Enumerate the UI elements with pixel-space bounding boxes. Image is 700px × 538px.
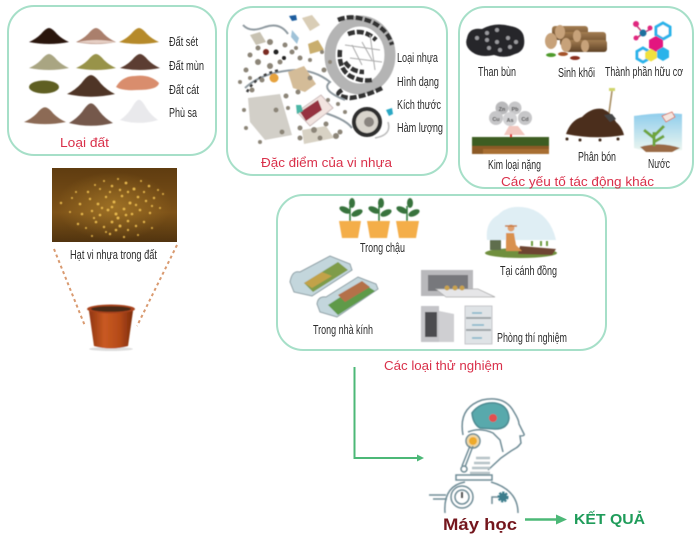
icon: fertilizer [566,88,624,142]
factor labels, lower row [488,149,670,172]
heading: other factors: Các yếu tố tác động khác [501,174,655,189]
panel: experiment types [277,195,606,350]
factor labels, lower row: Nước [648,156,670,171]
soil type labels: Đất cát [169,82,199,97]
characteristic labels: Loại nhựa [397,50,439,65]
icon: heavy metals: Zn [499,107,506,113]
factor labels, lower row: Kim loại nặng [488,157,541,172]
soil type labels: Đất sét [169,34,198,49]
icon: heavy metals: Cd [521,117,529,123]
microplastic debris image [238,15,393,144]
heading: soil types: Loại đất [60,135,109,150]
icon: water [634,112,682,152]
heading: experiment types: Các loại thử nghiệm [384,358,503,373]
heading: microplastic characteristics: Đặc điểm của vi nhựa [261,155,393,170]
label: laboratory: Phòng thí nghiệm [497,330,567,345]
icon: heavy metals [472,102,549,154]
arrow: experiments to machine learning [354,367,424,462]
icon: greenhouses [290,256,378,317]
icon: heavy metals: As [506,118,514,124]
factor labels, upper row: Than bùn [478,64,516,79]
icon: farmer in field [485,207,557,258]
icon: laboratory equipment [421,270,495,344]
characteristic labels: Hàm lượng [397,120,443,135]
soil type labels: Đất mùn [169,58,204,73]
soil type labels: Phù sa [169,105,198,120]
icon: robot head machine learning [429,399,524,513]
icon: biomass logs [545,25,607,60]
label: in greenhouse: Trong nhà kính [313,322,373,337]
panel: microplastic characteristics [227,7,447,175]
caption: microplastic particles in soil: Hạt vi nhựa trong đất [70,247,157,262]
panel: soil types [8,6,216,155]
characteristic labels: Kích thước [397,97,441,112]
label: result: KẾT QUẢ [574,511,645,528]
icon: potted plants [338,198,421,238]
label: machine learning: Máy học [443,515,517,534]
label: in pots: Trong chậu [360,240,405,255]
panel: other factors [459,7,693,189]
factor labels, lower row: Phân bón [578,149,616,164]
soil type labels [169,34,204,120]
dashed zoom lines [54,245,177,326]
icon: organic compounds [633,21,670,62]
soil with microplastic particles image [52,168,177,242]
characteristic labels: Hình dạng [397,74,439,89]
icon: plant pot [87,304,135,351]
icon: heavy metals: Cu [492,117,500,123]
factor labels, upper row: Sinh khối [558,65,595,80]
label: in the field: Tại cánh đồng [500,263,557,278]
factor labels, upper row [478,64,683,80]
icon: peat [466,25,524,57]
icon: heavy metals: Pb [511,107,519,113]
arrow: machine learning to result [525,514,567,524]
characteristic labels [397,50,443,135]
soil sample piles [24,28,160,126]
